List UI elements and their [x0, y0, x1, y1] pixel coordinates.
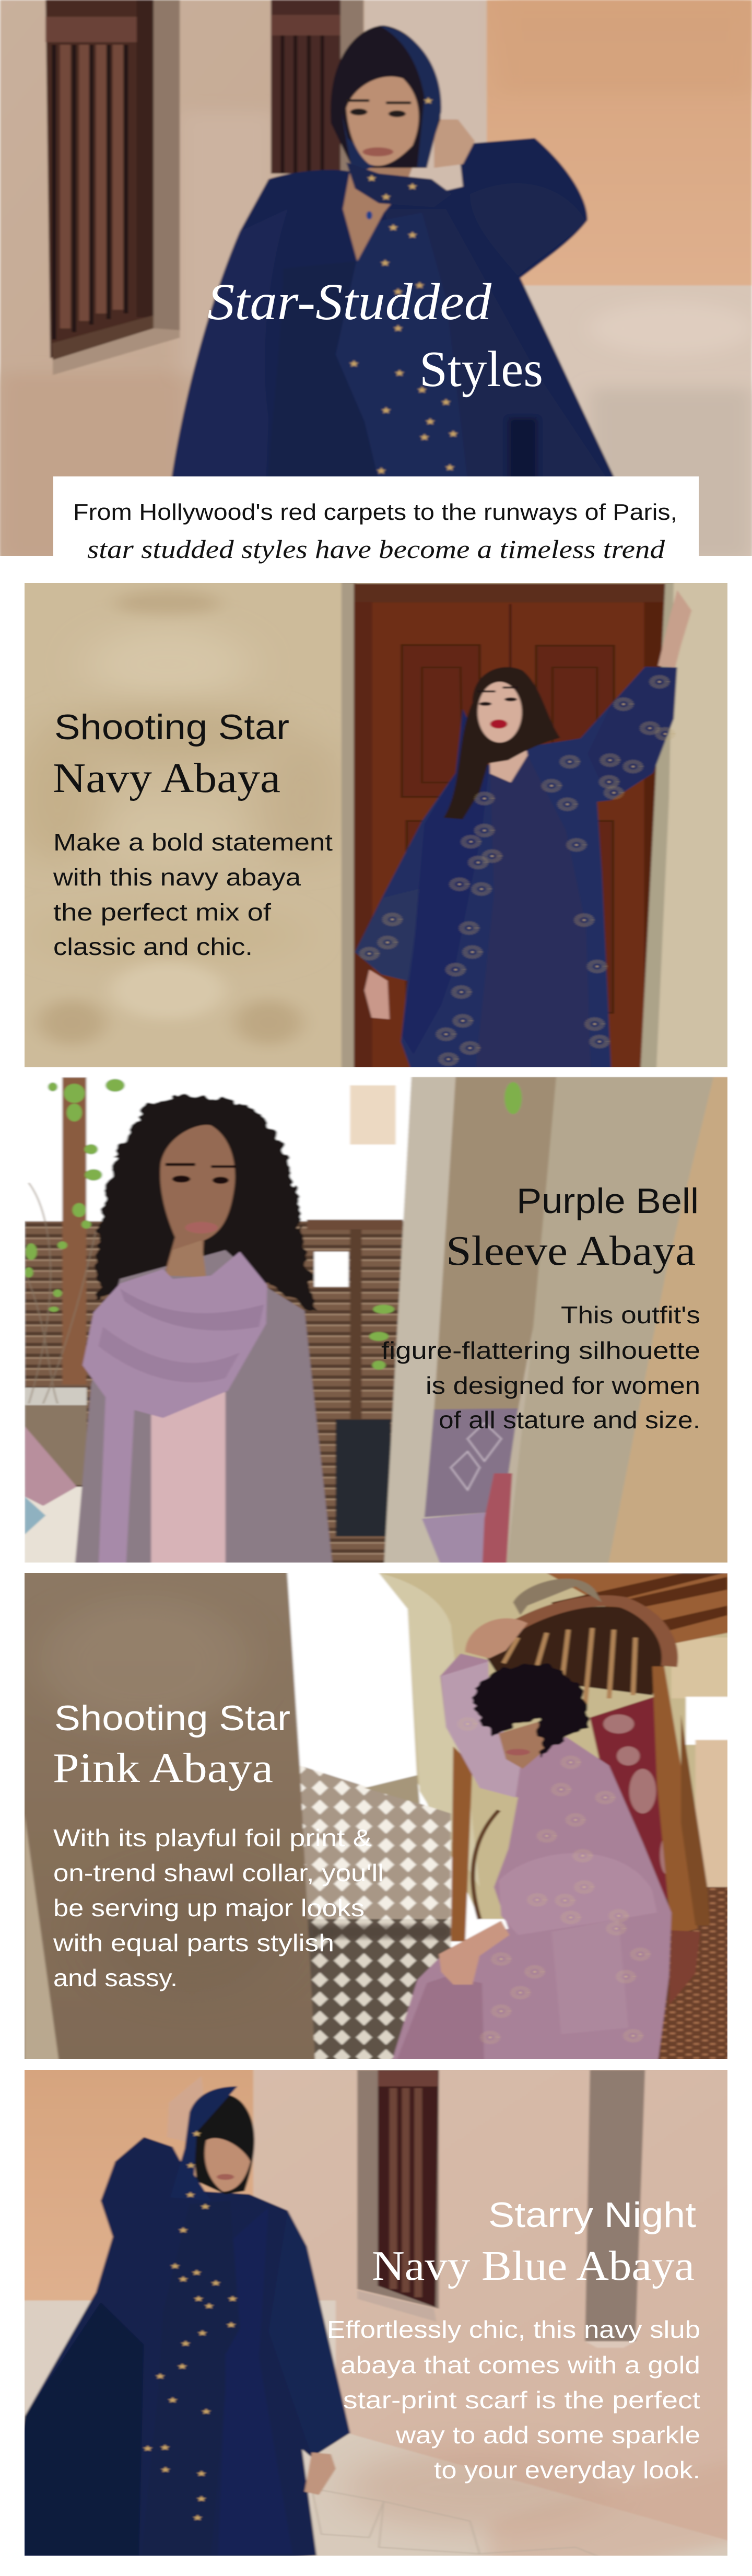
wicker swing: [657, 1887, 729, 2069]
shutters: [25, 1221, 403, 1572]
photo: woman in pink abaya on a wicker swing: [25, 1573, 727, 2059]
planter: [336, 1419, 391, 1536]
second window: [271, 0, 340, 173]
mauve scarf: [83, 1252, 267, 1572]
hand: [434, 120, 475, 168]
scarf wrap: [346, 162, 452, 207]
abaya: [390, 1653, 672, 2069]
neck and chest: [343, 157, 415, 261]
photo: woman in navy abaya walking in an alley: [25, 2070, 727, 2556]
lattice: [300, 1766, 451, 1919]
body text: [53, 829, 333, 960]
pillar: [0, 1567, 315, 2069]
intro white box with text: [53, 476, 699, 576]
curly hair: [473, 1664, 588, 1756]
robe: [0, 2137, 350, 2576]
body text: Make a bold statement: [53, 829, 333, 856]
subheading: Pink Abaya: [53, 1745, 273, 1791]
cape: [355, 667, 677, 1076]
tree trunk and vines: [62, 1077, 86, 1384]
dress: [475, 755, 591, 1076]
door panels: [402, 645, 614, 1013]
subheading: Navy Blue Abaya: [372, 2243, 695, 2289]
body text: of all stature and size.: [439, 1406, 700, 1433]
body text: star-print scarf is the perfect: [343, 2386, 700, 2414]
panel: Shooting Star Pink Abaya: [25, 1573, 727, 2546]
shawl: [402, 709, 489, 1054]
body text: [381, 1301, 700, 1433]
panel: Purple Bell Sleeve Abaya: [25, 1077, 727, 1563]
neck: [489, 738, 527, 783]
body text: and sassy.: [53, 1964, 178, 1991]
left cushions and bench: [25, 1487, 87, 1572]
hero title second line: Styles: [419, 341, 543, 397]
panel: Shooting Star Navy Abaya: [25, 583, 727, 1067]
hero photo: woman in navy star-print abaya: [0, 0, 752, 556]
body text: figure-flattering silhouette: [381, 1337, 700, 1364]
lower hand: [304, 2453, 336, 2495]
body text: with equal parts stylish: [53, 1929, 334, 1956]
gold sunbursts: [464, 837, 478, 846]
body text: Effortlessly chic, this navy slub: [327, 2316, 700, 2343]
body text: to your everyday look.: [434, 2456, 700, 2484]
window: [357, 2070, 439, 2309]
intro italic line: star studded styles have become a timeless trend: [87, 534, 665, 564]
cushions: [425, 1408, 518, 1517]
heading: Shooting Star: [54, 707, 289, 747]
right wall: [640, 575, 752, 1076]
hair: [96, 1096, 316, 1314]
background building: [350, 1086, 396, 1145]
left window: [45, 0, 154, 358]
gold stars: [389, 224, 398, 230]
head: [331, 26, 441, 168]
pillar shadow: [585, 2070, 645, 2341]
sunbursts: [575, 1851, 590, 1860]
body text: abaya that comes with a gold: [340, 2351, 700, 2379]
subheading: Navy Abaya: [53, 755, 280, 801]
body text: [53, 1824, 384, 1991]
photo: woman in navy abaya at a wooden door: [25, 583, 727, 1067]
face: [160, 1125, 235, 1276]
gold stars: [192, 2269, 201, 2275]
star scarf: [142, 2201, 240, 2556]
head: [190, 2094, 254, 2194]
heading: Starry Night: [488, 2195, 696, 2235]
face: [499, 1721, 549, 1769]
intro line: From Hollywood's red carpets to the runways of Paris,: [73, 499, 677, 525]
hero title: Star-Studded: [207, 273, 492, 331]
body text: [327, 2316, 700, 2484]
raised arm: [658, 590, 691, 668]
body text: classic and chic.: [53, 933, 253, 960]
arm: [465, 1618, 527, 1658]
hair: [443, 667, 560, 819]
body text: with this navy abaya: [53, 864, 301, 891]
ceiling beams: [547, 1573, 752, 1644]
photo: woman in purple abaya on a terrace: [25, 1077, 727, 1563]
body text: is designed for women: [426, 1372, 700, 1399]
hand on knee: [439, 1921, 509, 1985]
body text: way to add some sparkle: [395, 2421, 700, 2449]
lower hand: [365, 970, 390, 1019]
door: [354, 584, 666, 1073]
top cushion rope: [513, 1579, 602, 1615]
heading: Purple Bell: [516, 1181, 699, 1221]
body text: be serving up major looks: [53, 1894, 365, 1921]
body text: the perfect mix of: [53, 899, 271, 926]
body text: on-trend shawl collar, you'll: [53, 1859, 384, 1886]
panel: hero photo with title: [0, 0, 752, 556]
body text: With its playful foil print &: [53, 1824, 372, 1851]
body text: This outfit's: [561, 1301, 700, 1328]
cardigan: [74, 1250, 333, 1572]
person body: [172, 138, 614, 585]
raised hand: [167, 2076, 205, 2142]
back wall and arch: [379, 1573, 752, 1919]
subheading: Sleeve Abaya: [446, 1228, 696, 1274]
panel: Starry Night Navy Blue Abaya: [25, 2070, 727, 2556]
walls: [384, 1077, 752, 1572]
dress: [151, 1391, 226, 1572]
heading: Shooting Star: [54, 1698, 290, 1738]
